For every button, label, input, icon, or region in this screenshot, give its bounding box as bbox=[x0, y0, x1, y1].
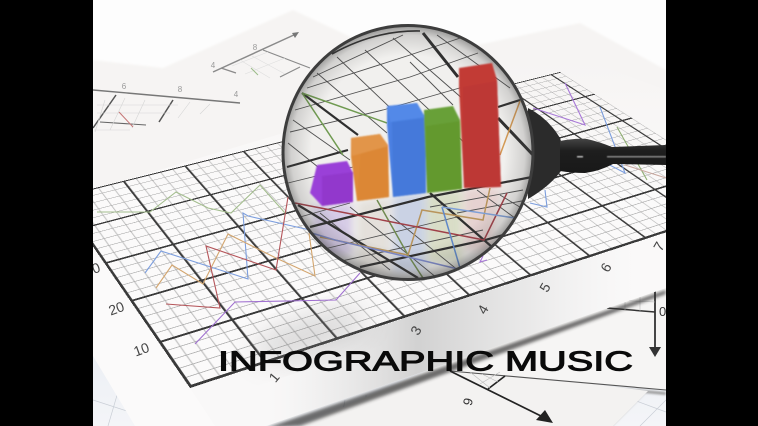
orange bar bbox=[351, 134, 389, 201]
axis numbers: 5 bbox=[536, 280, 554, 295]
axis numbers: 6 bbox=[597, 260, 615, 275]
axis numbers: 20 bbox=[106, 298, 127, 318]
top left chart one bbox=[93, 90, 240, 132]
axis numbers: 4 bbox=[474, 302, 492, 317]
axis numbers: 30 bbox=[82, 259, 103, 279]
blue bar bbox=[387, 103, 426, 197]
green bar bbox=[424, 106, 462, 193]
lower sheet with arrow bbox=[300, 365, 648, 426]
bar chart bbox=[310, 63, 501, 206]
label 0 on right sheet: 0 bbox=[659, 304, 666, 319]
lens bbox=[282, 24, 534, 280]
data lines on main chart bbox=[97, 83, 666, 344]
lens magnified thin grid bbox=[288, 32, 533, 280]
lens glass bbox=[283, 26, 533, 280]
top left chart one labels: 6 bbox=[122, 82, 127, 91]
soft shading on grid bbox=[248, 301, 372, 369]
right black bar bbox=[666, 0, 758, 426]
red bar bbox=[459, 63, 501, 188]
left black bar bbox=[0, 0, 93, 426]
major rows bbox=[59, 72, 758, 388]
axis numbers: 3 bbox=[407, 323, 425, 338]
lower sheet chart bbox=[450, 371, 553, 423]
top left chart one labels: 8 bbox=[178, 85, 183, 94]
axis numbers: 1 bbox=[265, 369, 283, 385]
right sheet chart bbox=[607, 291, 661, 357]
main paper sheet bbox=[93, 50, 666, 426]
top left chart one labels: 4 bbox=[234, 90, 239, 99]
axis numbers: 7 bbox=[650, 239, 668, 254]
foreground chart, lens and title bbox=[93, 24, 666, 382]
lower right sheet shadow bbox=[430, 373, 666, 426]
lens magnified thick grid bbox=[287, 33, 533, 278]
top left chart two labels: 4 bbox=[211, 61, 216, 70]
top left chart two bbox=[213, 32, 310, 78]
lens rim bbox=[283, 26, 533, 280]
sheet edge bbox=[450, 371, 666, 390]
lens edge shading bbox=[282, 24, 534, 280]
axis numbers bbox=[82, 239, 668, 385]
top left chart two labels bbox=[211, 43, 258, 70]
upper right sheet bbox=[420, 250, 666, 390]
lens magnified data lines bbox=[285, 93, 520, 278]
top left chart two labels: 8 bbox=[253, 43, 258, 52]
shadow under main sheet bbox=[266, 290, 666, 426]
paper strip shading bbox=[190, 233, 666, 426]
magnifying glass handle bbox=[528, 108, 666, 199]
lens reflection of bars bbox=[312, 187, 501, 272]
label 9: 9 bbox=[460, 396, 476, 407]
lens inner rim highlight bbox=[332, 31, 420, 54]
main chart grid bbox=[93, 72, 666, 388]
top left chart one labels bbox=[122, 82, 239, 99]
title: INFOGRAPHIC MUSIC bbox=[218, 346, 633, 376]
major columns bbox=[59, 74, 753, 388]
axis numbers: 10 bbox=[131, 339, 152, 359]
purple bar bbox=[310, 161, 353, 206]
fine grid bbox=[59, 72, 758, 388]
